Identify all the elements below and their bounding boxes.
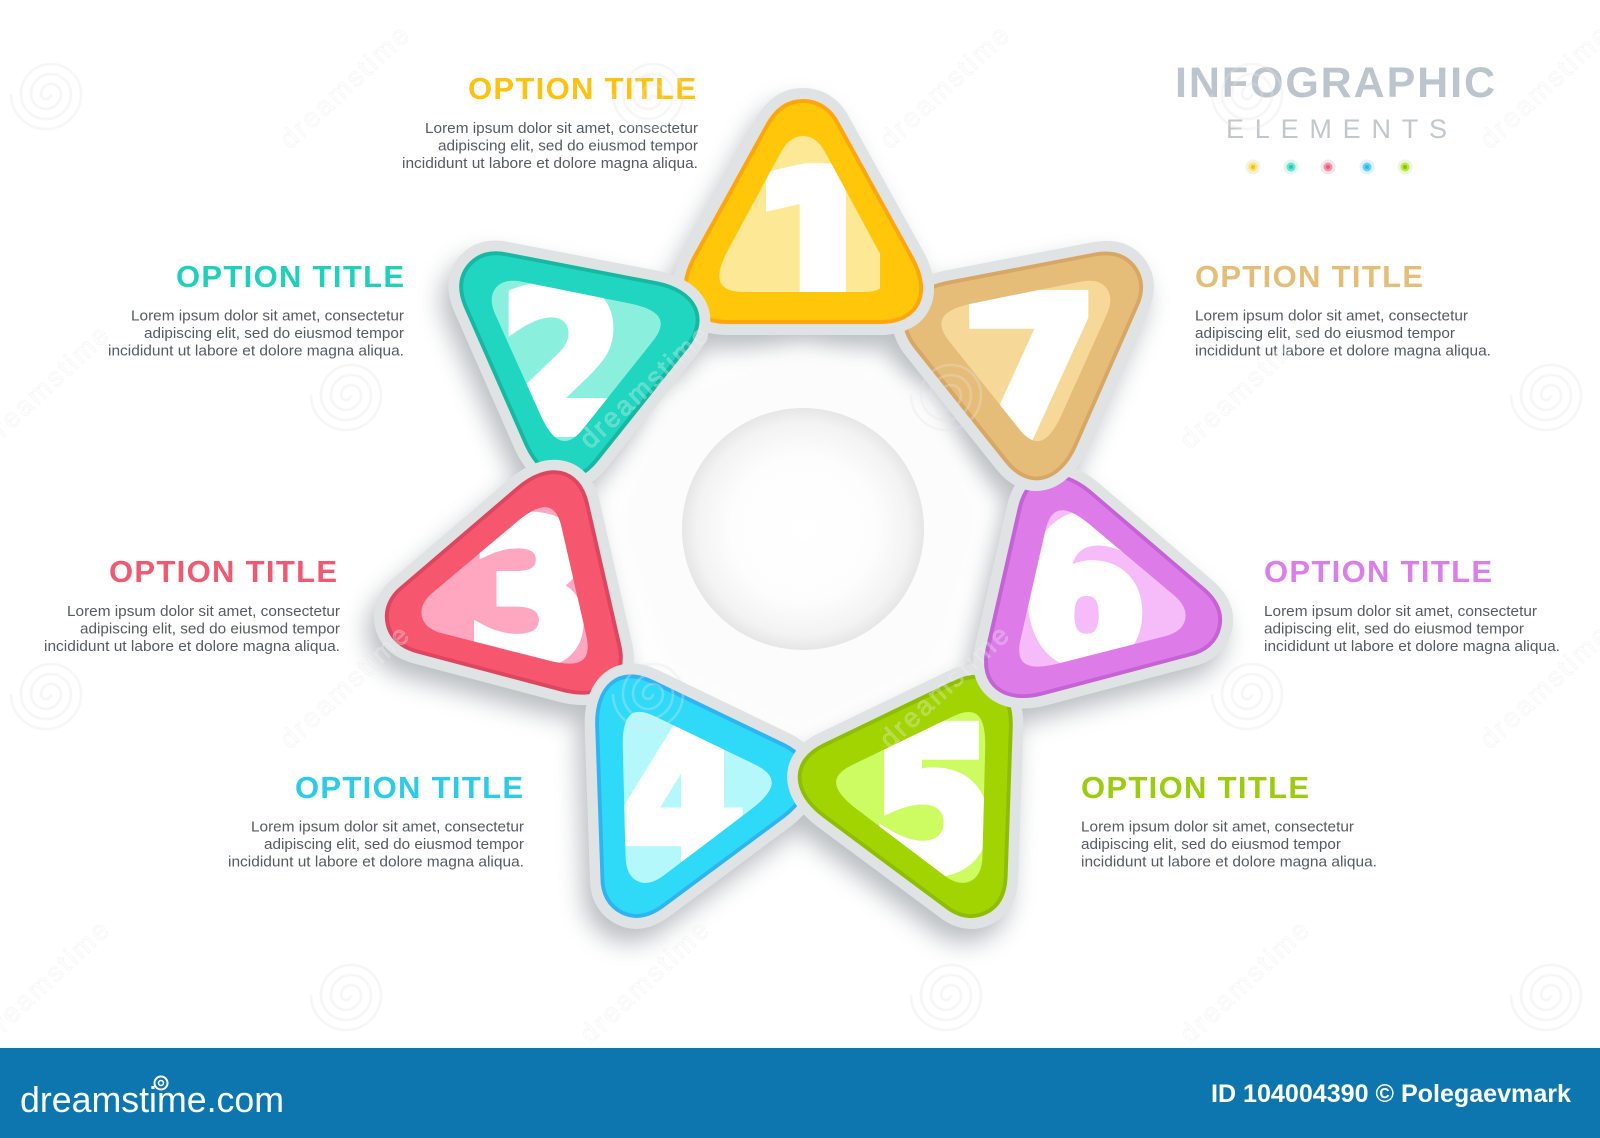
watermark text: dreamstime [274, 620, 415, 754]
triangle 1 yellow [674, 88, 906, 335]
option 6 text: OPTION TITLE [1264, 554, 1492, 589]
watermark text: dreamstime [1174, 320, 1315, 454]
option 6 text: incididunt ut labore et dolore magna aliqua. [1264, 639, 1560, 655]
triangle 4 cyan [584, 664, 804, 929]
option 1 text [402, 71, 698, 172]
option 7 text [1195, 259, 1491, 360]
option 4 text: adipiscing elit, sed do eiusmod tempor [264, 837, 524, 853]
option 7 text: OPTION TITLE [1195, 259, 1423, 294]
triangle 3 red: 3 [468, 482, 592, 709]
header: infographic elements [1175, 59, 1495, 144]
watermark text: dreamstime [874, 620, 1015, 754]
watermark text: dreamstime [874, 20, 1015, 154]
watermark text: dreamstime [574, 320, 715, 454]
footer image id: ID 104004390 © Polegaevmark [1211, 1080, 1571, 1108]
triangle shadows [356, 115, 1237, 975]
option 2 text: Lorem ipsum dolor sit amet, consectetur [131, 308, 404, 324]
watermark text: dreamstime [1174, 915, 1315, 1049]
triangle 5 green: 5 [871, 689, 995, 916]
triangle 2 teal [448, 240, 710, 482]
footer bar [0, 1048, 1600, 1138]
triangle 7 tan: 7 [962, 257, 1098, 484]
option 2 text: OPTION TITLE [176, 259, 404, 294]
option 7 text: Lorem ipsum dolor sit amet, consectetur [1195, 308, 1468, 324]
triangle 3 red [374, 460, 634, 705]
option 4 text [228, 770, 524, 870]
option 4 text: Lorem ipsum dolor sit amet, consectetur [251, 820, 524, 836]
triangle 4 cyan: 4 [621, 686, 745, 913]
center circle [682, 408, 924, 650]
option 3 text: OPTION TITLE [109, 554, 337, 589]
option 2 text: adipiscing elit, sed do eiusmod tempor [144, 326, 404, 342]
option 1 text: adipiscing elit, sed do eiusmod tempor [438, 138, 698, 154]
header: infographic elements: ELEMENTS [1226, 114, 1447, 144]
option 2 text [108, 259, 404, 360]
option 7 text: incididunt ut labore et dolore magna aliqua. [1195, 344, 1491, 360]
triangle 6 purple: 6 [1022, 480, 1146, 707]
footer logo: dreamstime.com [20, 1079, 284, 1120]
option 2 text: incididunt ut labore et dolore magna aliqua. [108, 344, 404, 360]
option 4 text: incididunt ut labore et dolore magna aliqua. [228, 854, 524, 870]
option 3 text: adipiscing elit, sed do eiusmod tempor [80, 622, 340, 638]
option 6 text [1264, 554, 1560, 655]
triangle 6 purple [973, 469, 1233, 708]
option 5 text: Lorem ipsum dolor sit amet, consectetur [1081, 820, 1354, 836]
triangle 1 yellow: 1 [749, 126, 887, 377]
option 4 text: OPTION TITLE [295, 770, 523, 805]
option 5 text: incididunt ut labore et dolore magna aliqua. [1081, 854, 1377, 870]
option 3 text [44, 554, 340, 655]
option 5 text [1081, 770, 1377, 870]
option 1 text: Lorem ipsum dolor sit amet, consectetur [425, 121, 698, 137]
triangle 5 green [787, 664, 1023, 929]
watermark text: dreamstime [574, 915, 715, 1049]
option 3 text: incididunt ut labore et dolore magna aliqua. [44, 639, 340, 655]
option 6 text: adipiscing elit, sed do eiusmod tempor [1264, 622, 1524, 638]
option 5 text: OPTION TITLE [1081, 770, 1309, 805]
triangle 7 tan [894, 241, 1154, 491]
triangle 2 teal: 2 [500, 251, 624, 478]
option 7 text: adipiscing elit, sed do eiusmod tempor [1195, 326, 1455, 342]
header: infographic elements: INFOGRAPHIC [1175, 59, 1495, 107]
option 3 text: Lorem ipsum dolor sit amet, consectetur [67, 604, 340, 620]
wheel interior fill [615, 345, 985, 735]
option 1 text: OPTION TITLE [468, 71, 696, 106]
triangle 1 corner overlapping triangle 7 [880, 254, 934, 334]
watermark text: dreamstime [274, 20, 415, 154]
legend dots [1246, 160, 1412, 174]
option 5 text: adipiscing elit, sed do eiusmod tempor [1081, 837, 1341, 853]
option 1 text: incididunt ut labore et dolore magna aliqua. [402, 156, 698, 172]
option 6 text: Lorem ipsum dolor sit amet, consectetur [1264, 604, 1537, 620]
